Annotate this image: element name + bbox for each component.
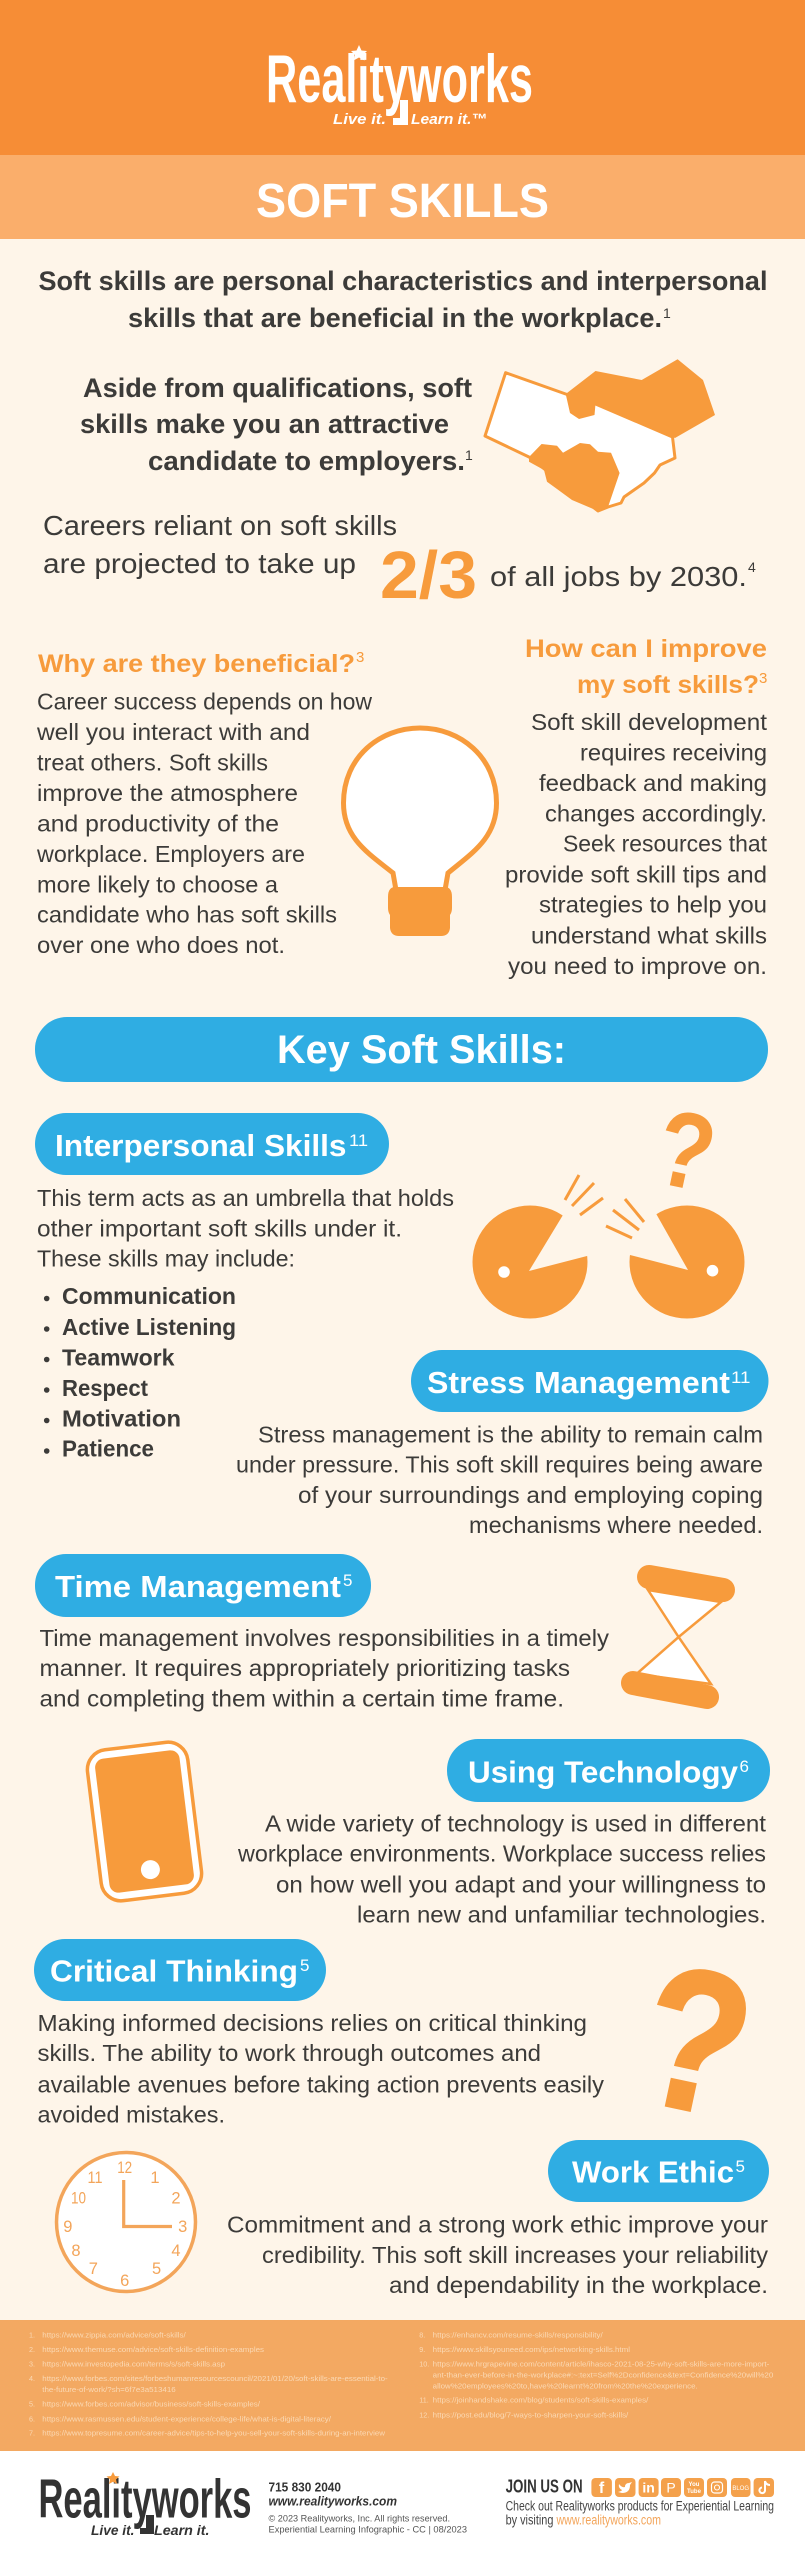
heading: Why are they beneficial? — [38, 650, 355, 678]
description — [37, 1185, 454, 1272]
social icons: Tube — [687, 2489, 702, 2495]
logo wordmark: Realityworks — [266, 41, 533, 117]
icon: clock: 11 — [88, 2169, 102, 2187]
contact details: Experiential Learning Infographic - CC | 08/2023 — [268, 2525, 467, 2536]
pill heading — [34, 1939, 326, 2001]
pill heading — [35, 1113, 389, 1175]
description: and completing them within a certain time frame. — [40, 1686, 564, 1712]
description: and dependability in the workplace. — [389, 2272, 768, 2298]
body text — [505, 709, 768, 979]
body text: strategies to help you — [539, 892, 767, 918]
references left column: https://www.rasmussen.edu/student-experience/college-life/what-is-digital-literacy/ — [42, 2414, 331, 2423]
heading: How can I improve — [525, 635, 767, 663]
statistic: two thirds of jobs: Careers reliant on soft skills — [43, 510, 397, 541]
references right column — [419, 2330, 773, 2419]
qualifications statement: 1 — [465, 447, 473, 463]
bullet list: Respect — [62, 1375, 148, 1401]
intro statement — [38, 266, 768, 333]
references right column: https://post.edu/blog/7-ways-to-sharpen-your-soft-skills/ — [433, 2410, 628, 2419]
qualifications statement: Aside from qualifications, soft — [83, 373, 472, 403]
icon: clock — [56, 2152, 196, 2292]
pill heading: 6 — [740, 1757, 749, 1776]
contact details — [268, 2480, 467, 2536]
body text: requires receiving — [580, 740, 767, 766]
icon: question mark: ? — [622, 1922, 770, 2161]
references right column: https://enhancv.com/resume-skills/responsibility/ — [433, 2330, 603, 2339]
section banner: key soft skills — [35, 1017, 768, 1082]
description: mechanisms where needed. — [469, 1512, 763, 1538]
description: avoided mistakes. — [38, 2101, 225, 2127]
pill heading: Using Technology — [468, 1755, 739, 1790]
references right column: 9. — [419, 2345, 425, 2354]
icon: clock: 4 — [171, 2242, 181, 2260]
intro statement: 1 — [663, 305, 671, 321]
references left column: 2. — [29, 2345, 35, 2354]
references left column: the-future-of-work/?sh=6f7e3a513416 — [42, 2385, 176, 2394]
references right column: 8. — [419, 2330, 425, 2339]
description: skills. The ability to work through outcomes and — [38, 2040, 541, 2066]
intro statement: Soft skills are personal characteristics and interpersonal — [38, 266, 768, 296]
description: Time management involves responsibilities in a timely — [40, 1625, 610, 1651]
bullet list — [44, 1283, 236, 1462]
contact details: www.realityworks.com — [268, 2494, 397, 2509]
footer logo: Learn it. — [154, 2522, 210, 2538]
panel: using technology — [237, 1739, 770, 1928]
icon: clock: 12 — [117, 2159, 132, 2177]
body text: feedback and making — [539, 770, 767, 796]
panel: stress management — [236, 1350, 768, 1538]
pill heading: 11 — [349, 1131, 368, 1150]
body text: provide soft skill tips and — [505, 861, 767, 887]
social icons: BLOG — [732, 2486, 749, 2492]
icon: clock: 6 — [120, 2272, 129, 2290]
social links: www.realityworks.com — [556, 2512, 661, 2527]
pill heading — [411, 1350, 768, 1412]
pill heading — [35, 1554, 371, 1617]
pill heading: Interpersonal Skills — [55, 1128, 346, 1163]
bullet list: Active Listening — [62, 1314, 236, 1340]
references left column — [29, 2330, 388, 2438]
body text: Seek resources that — [563, 831, 768, 857]
panel: work ethic — [227, 2140, 769, 2298]
panel: why are they beneficial: 3 — [356, 649, 364, 666]
body text: over one who does not. — [37, 932, 285, 958]
references left column: 3. — [29, 2360, 35, 2369]
body text: and productivity of the — [37, 811, 279, 837]
social icons: in — [642, 2480, 655, 2496]
footer logo — [38, 2468, 252, 2538]
description: on how well you adapt and your willingness to — [276, 1872, 766, 1898]
references right column: 10. — [419, 2360, 429, 2369]
icon: clock: 3 — [178, 2218, 187, 2236]
icon: two talking heads with question mark: ? — [646, 1086, 726, 1216]
panel: how can I improve: 3 — [759, 670, 767, 687]
references right column: 11. — [419, 2396, 429, 2405]
description — [38, 2010, 605, 2127]
references left column: 5. — [29, 2400, 35, 2409]
icon: clock: 8 — [71, 2242, 81, 2260]
pill heading: 5 — [300, 1956, 309, 1975]
statistic: two thirds of jobs: are projected to take up — [43, 548, 356, 579]
header banner with logo — [0, 0, 805, 155]
description: credibility. This soft skill increases your reliability — [262, 2242, 769, 2268]
icon: clock: 10 — [71, 2190, 86, 2208]
pill heading: Time Management — [55, 1569, 341, 1604]
body text: well you interact with and — [36, 719, 310, 745]
footer — [0, 2451, 805, 2560]
icon: hourglass — [633, 1577, 723, 1697]
body text: Soft skill development — [531, 709, 768, 735]
bullet list: Communication — [62, 1283, 236, 1309]
references right column: ant-than-ever-before-in-the-workplace#:~:text=Self%2Dconfidence&text=Confidence%20will%20 — [433, 2371, 773, 2380]
references right column: 12. — [419, 2410, 429, 2419]
pill heading: 11 — [731, 1368, 750, 1387]
description: learn new and unfamiliar technologies. — [357, 1902, 766, 1928]
description — [40, 1625, 610, 1712]
social links — [506, 2477, 774, 2527]
qualifications statement — [80, 373, 473, 476]
panel: how can I improve — [505, 635, 768, 979]
description: available avenues before taking action prevents easily — [38, 2071, 605, 2097]
social icons — [591, 2478, 774, 2497]
qualifications statement: candidate to employers. — [148, 446, 465, 476]
icon: clock: 9 — [63, 2218, 72, 2236]
title: SOFT SKILLS — [256, 175, 549, 228]
body text: improve the atmosphere — [37, 780, 298, 806]
statistic: two thirds of jobs — [43, 510, 756, 613]
footer logo: Realityworks — [38, 2468, 252, 2530]
bullet list: Teamwork — [62, 1345, 175, 1371]
pill heading — [447, 1739, 770, 1802]
section banner: key soft skills: Key Soft Skills: — [277, 1028, 566, 1072]
contact details: 715 830 2040 — [268, 2480, 341, 2495]
panel: interpersonal skills — [35, 1113, 454, 1462]
contact details: © 2023 Realityworks, Inc. All rights reserved. — [268, 2514, 450, 2525]
icon: smartphone — [85, 1740, 204, 1903]
social links: JOIN US ON — [506, 2477, 583, 2497]
references panel — [0, 2320, 805, 2451]
description: Making informed decisions relies on critical thinking — [38, 2010, 587, 2036]
statistic: two thirds of jobs: of all jobs by 2030. — [490, 561, 747, 592]
description: of your surroundings and employing coping — [298, 1482, 763, 1508]
description: A wide variety of technology is used in different — [265, 1811, 767, 1837]
body text — [36, 688, 372, 958]
pill heading: Stress Management — [427, 1365, 730, 1400]
description — [227, 2212, 769, 2298]
big number: 2/3 — [380, 538, 477, 613]
logo y tail — [393, 100, 408, 125]
references left column: https://www.forbes.com/sites/forbeshumanresourcescouncil/2021/01/20/soft-skills-are-essential-to- — [42, 2374, 388, 2383]
description — [237, 1811, 767, 1928]
panel: critical thinking — [34, 1939, 605, 2127]
pill heading: 5 — [736, 2157, 745, 2176]
body text: more likely to choose a — [37, 872, 278, 898]
social icons: f — [599, 2480, 605, 2497]
references right column: https://www.hrgrapevine.com/content/article/ihasco-2021-08-25-why-soft-skills-are-more-import- — [433, 2360, 770, 2369]
footer logo: Live it. — [91, 2522, 134, 2538]
title band — [0, 155, 805, 239]
intro statement: skills that are beneficial in the workplace. — [128, 303, 662, 333]
icon: handshake — [485, 359, 715, 511]
references right column: https://www.skillsyouneed.com/ips/networking-skills.html — [433, 2345, 630, 2354]
body text: treat others. Soft skills — [37, 750, 268, 776]
body text: changes accordingly. — [545, 801, 767, 827]
icon: clock: 7 — [89, 2260, 98, 2278]
body text: you need to improve on. — [508, 953, 767, 979]
body text: candidate who has soft skills — [37, 902, 337, 928]
social links: by visiting — [506, 2512, 553, 2527]
pill heading: Critical Thinking — [50, 1954, 298, 1989]
panel: time management — [35, 1554, 610, 1712]
icon: clock: 1 — [150, 2169, 160, 2187]
references left column: 1. — [29, 2330, 35, 2339]
qualifications statement: skills make you an attractive — [80, 409, 449, 439]
references left column: https://www.zippia.com/advice/soft-skills/ — [42, 2330, 186, 2339]
icon: clock: 5 — [152, 2260, 161, 2278]
logo star — [351, 45, 367, 60]
description: This term acts as an umbrella that holds — [37, 1185, 454, 1211]
description: manner. It requires appropriately prioritizing tasks — [40, 1655, 570, 1681]
logo tagline: Learn it.™ — [411, 111, 487, 128]
description: Stress management is the ability to remain calm — [258, 1422, 763, 1448]
social icons: You — [689, 2482, 700, 2488]
bullet list: Patience — [62, 1436, 154, 1462]
references right column: allow%20employees%20to,have%20learnt%20from%20the%20experience. — [433, 2382, 698, 2391]
statistic: two thirds of jobs: 4 — [748, 559, 756, 575]
description: under pressure. This soft skill requires being aware — [236, 1452, 763, 1478]
body text: Career success depends on how — [37, 688, 372, 714]
logo tagline: Live it. — [333, 111, 386, 128]
icon: clock: 2 — [171, 2190, 181, 2208]
description — [236, 1422, 763, 1538]
bullet list: Motivation — [62, 1406, 181, 1432]
body text: understand what skills — [531, 922, 767, 948]
pill heading: 5 — [343, 1571, 352, 1590]
body text: workplace. Employers are — [36, 841, 305, 867]
description: Commitment and a strong work ethic improve your — [227, 2212, 768, 2238]
references left column: 7. — [29, 2429, 35, 2438]
social icons: P — [666, 2480, 676, 2496]
references left column: https://www.themuse.com/advice/soft-skills-definition-examples — [42, 2345, 264, 2354]
panel: why are they beneficial — [36, 649, 372, 958]
references left column: https://www.forbes.com/advisor/business/soft-skills-examples/ — [42, 2400, 260, 2409]
references left column: https://www.investopedia.com/terms/s/soft-skills.asp — [42, 2360, 225, 2369]
logo tagline — [333, 111, 487, 128]
references right column: https://joinhandshake.com/blog/students/soft-skills-examples/ — [433, 2396, 648, 2405]
references left column: 4. — [29, 2374, 35, 2383]
description: workplace environments. Workplace success relies — [237, 1841, 766, 1867]
references left column: https://www.topresume.com/career-advice/tips-to-help-you-sell-your-soft-skills-during-an-interview — [42, 2429, 386, 2438]
references left column: 6. — [29, 2414, 35, 2423]
description: other important soft skills under it. — [37, 1216, 402, 1242]
icon: light bulb — [344, 728, 496, 936]
description: These skills may include: — [37, 1246, 295, 1272]
icon: two talking heads with question mark — [472, 1086, 744, 1318]
pill heading: Work Ethic — [572, 2154, 734, 2189]
panel: how can I improve: my soft skills? — [577, 671, 759, 699]
pill heading — [548, 2140, 769, 2202]
